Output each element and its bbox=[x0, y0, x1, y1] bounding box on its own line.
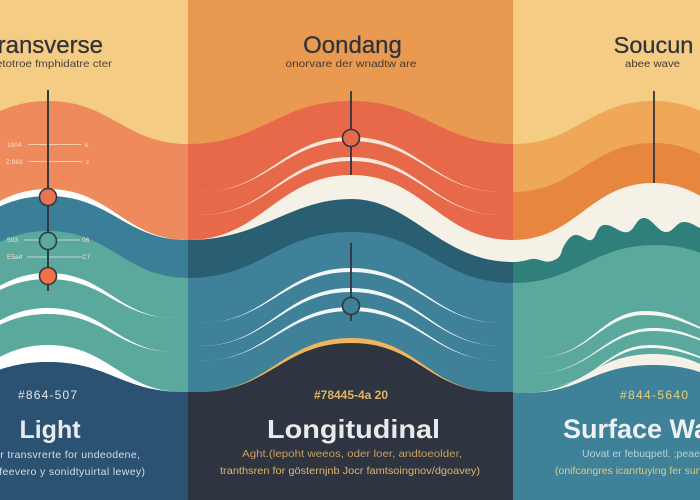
heading: Light: Light bbox=[19, 416, 81, 444]
subtitle: soucun: abee wave bbox=[625, 58, 680, 70]
description: longitudinal bbox=[220, 448, 480, 477]
description: longitudinal: Aght.(lepoht weeos, oder loer, andtoeolder, bbox=[242, 448, 462, 460]
scale labels: e bbox=[85, 142, 89, 149]
marker line bbox=[653, 91, 655, 183]
description: light bbox=[0, 449, 145, 478]
subtitle: oondang: onorvare der wnadtw are bbox=[286, 58, 417, 70]
marker line with nodes bbox=[40, 90, 56, 291]
scale labels: 503 bbox=[7, 237, 18, 244]
code label: light: #864-507 bbox=[18, 388, 77, 402]
scale labels: Z:863 bbox=[6, 159, 23, 166]
description: surface bbox=[555, 448, 700, 477]
code label: surface: #844-5640 bbox=[620, 388, 688, 402]
description: longitudinal: tranthsren for gösternjnb Jocr famtsoingnov/dgoavey) bbox=[220, 465, 480, 477]
scale labels: 1004 bbox=[7, 142, 22, 149]
scale labels: E5a4 bbox=[7, 254, 23, 261]
panel: surface wave bbox=[513, 0, 700, 500]
marker line: lower bbox=[342, 243, 360, 321]
title: Soucun: Soucun bbox=[614, 32, 693, 58]
scale labels: C7 bbox=[82, 254, 91, 261]
scale labels: z bbox=[86, 159, 89, 166]
scale labels bbox=[6, 142, 91, 261]
marker line: upper bbox=[342, 91, 360, 175]
panel: transverse / light bbox=[0, 0, 188, 500]
code label: longitudinal: #78445-4a 20 bbox=[314, 388, 388, 402]
heading: Longitudinal: Longitudinal bbox=[267, 414, 440, 444]
panel: longitudinal bbox=[188, 0, 513, 500]
scale labels: 06 bbox=[82, 237, 90, 244]
title: Oondang: Oondang bbox=[303, 32, 402, 59]
